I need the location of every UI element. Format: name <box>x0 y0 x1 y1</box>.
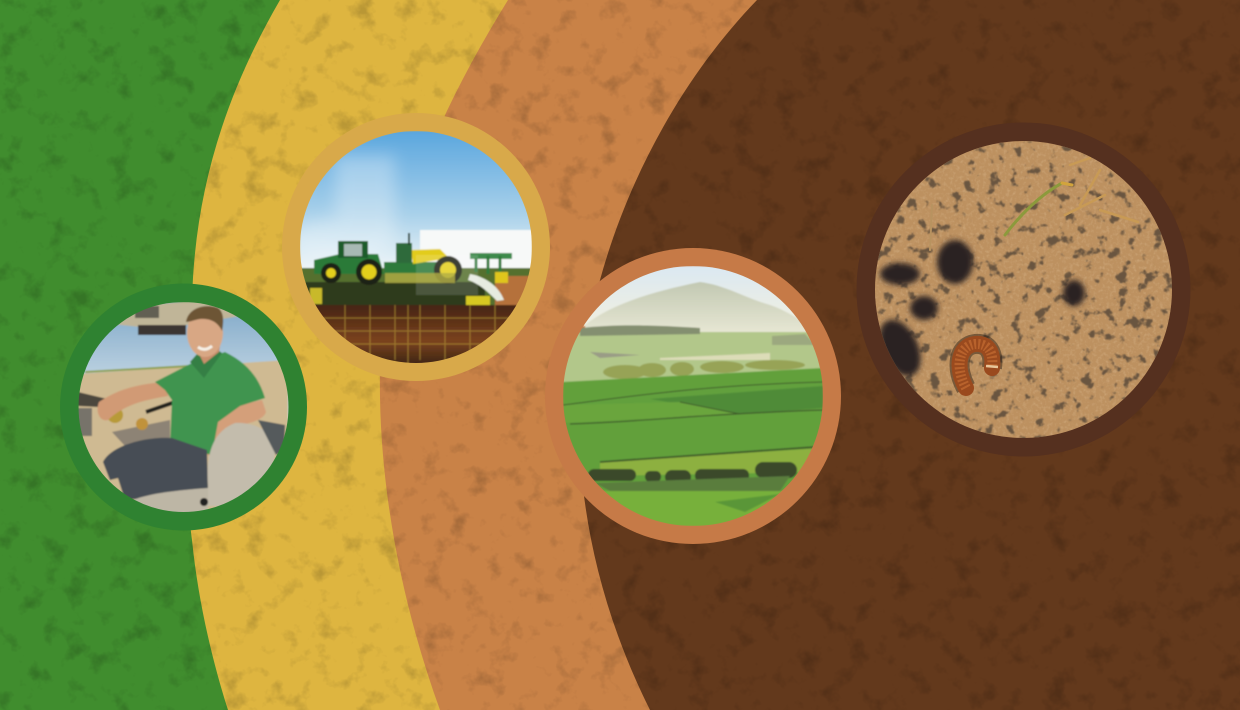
seat <box>208 423 275 507</box>
tree line <box>603 360 805 379</box>
data overlay <box>290 155 395 262</box>
field boundaries <box>563 382 823 462</box>
sprayer <box>384 262 450 274</box>
cab roof <box>112 302 240 327</box>
millipede <box>960 344 998 388</box>
spray jet <box>468 274 504 301</box>
head <box>199 346 220 365</box>
band: green surface <box>0 0 280 710</box>
band: orange subsoil <box>0 0 757 710</box>
band: yellow topsoil <box>0 0 508 710</box>
mountain <box>584 282 806 333</box>
main fields <box>563 368 822 492</box>
circle: green rolling fields <box>545 248 841 544</box>
hedge <box>588 462 797 484</box>
jeans <box>103 438 208 500</box>
circle: soil with millipede <box>856 122 1190 456</box>
dry stalks <box>930 158 1138 250</box>
dark hollows <box>871 240 1085 383</box>
subsoil <box>316 304 516 363</box>
field surface <box>300 268 532 306</box>
steering and console <box>78 392 105 408</box>
tractor <box>314 254 384 274</box>
far fields <box>564 331 820 383</box>
foreground field <box>600 491 790 526</box>
field <box>78 360 288 512</box>
shirt <box>155 352 265 455</box>
arms <box>98 382 168 420</box>
circle: tractor and sprayer with soil grid <box>282 113 550 381</box>
circle: farmer in tractor cab <box>60 284 307 530</box>
overlay panel <box>416 255 478 295</box>
